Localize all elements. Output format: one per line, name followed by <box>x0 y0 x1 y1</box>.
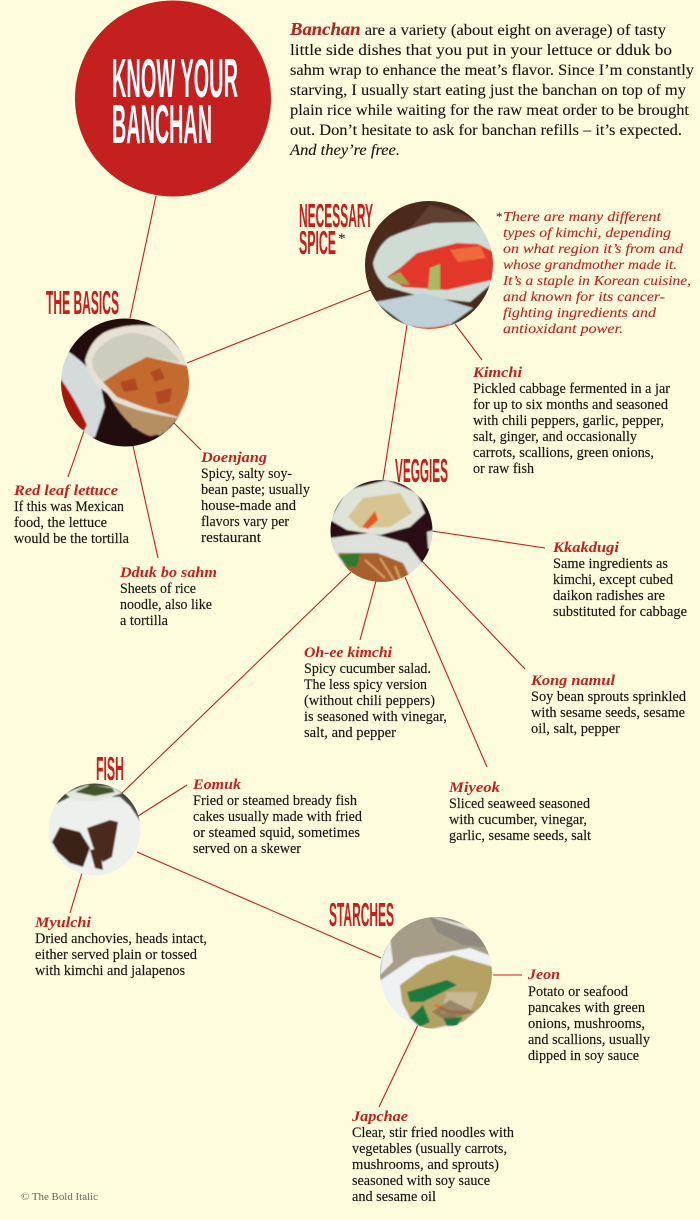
item: kimchi: Kimchi <box>472 365 523 381</box>
item: doenjang: Doenjang <box>200 450 268 466</box>
note: kimchi footnote: antioxidant power. <box>503 322 623 337</box>
note: kimchi footnote: on what region it’s from and <box>503 242 684 257</box>
credit: © The Bold Italic <box>21 1192 99 1203</box>
heading: necessary spice <box>299 197 373 261</box>
item: kimchi <box>472 365 670 477</box>
item: myulchi: with kimchi and jalapenos <box>35 963 185 979</box>
item: red leaf lettuce: food, the lettuce <box>14 515 107 531</box>
intro text <box>289 19 694 159</box>
item: kkakdugi: Kkakdugi <box>552 540 620 556</box>
item: kong namul: oil, salt, pepper <box>531 721 620 737</box>
item: japchae: Japchae <box>351 1109 408 1125</box>
item: kimchi: carrots, scallions, green onions, <box>473 445 654 461</box>
photo: myulchi <box>48 784 140 876</box>
item: jeon: Potato or seafood <box>528 984 629 1000</box>
photo: kimchi <box>365 201 493 329</box>
item: kimchi: salt, ginger, and occasionally <box>473 429 638 445</box>
item: dduk bo sahm <box>119 565 217 629</box>
intro text: out. Don’t hesitate to ask for banchan refills – it’s expected. <box>290 122 682 139</box>
item: kkakdugi: daikon radishes are <box>553 588 665 604</box>
item: red leaf lettuce: Red leaf lettuce <box>13 483 118 499</box>
photo: veggies <box>330 480 432 582</box>
item: myulchi: either served plain or tossed <box>35 947 198 963</box>
title badge: BANCHAN <box>112 93 212 155</box>
note: kimchi footnote: * <box>496 209 502 224</box>
item: jeon: onions, mushrooms, <box>528 1016 645 1032</box>
title badge <box>75 0 271 196</box>
text: FISH <box>96 750 124 787</box>
note: kimchi footnote: and known for its cancer- <box>503 290 665 305</box>
item: oh-ee kimchi: is seasoned with vinegar, <box>304 709 447 725</box>
item: japchae: vegetables (usually carrots, <box>352 1141 507 1157</box>
item: jeon: dipped in soy sauce <box>528 1048 639 1064</box>
photo: doenjang <box>61 318 189 446</box>
item: eomuk: or steamed squid, sometimes <box>193 825 360 841</box>
item: myulchi: Myulchi <box>34 915 92 931</box>
item: red leaf lettuce <box>13 483 130 547</box>
text: KNOW YOUR <box>112 47 238 109</box>
item: miyeok <box>448 780 591 844</box>
item: myulchi: Dried anchovies, heads intact, <box>35 931 207 947</box>
item: red leaf lettuce: would be the tortilla <box>14 531 130 547</box>
item: doenjang: flavors vary per <box>201 514 289 530</box>
item: oh-ee kimchi <box>304 645 447 741</box>
text: THE BASICS <box>46 284 119 321</box>
item: doenjang: restaurant <box>201 530 261 546</box>
item: myulchi <box>34 915 207 979</box>
note: kimchi footnote: It’s a staple in Korean cuisine, <box>502 274 691 289</box>
text: VEGGIES <box>395 452 448 489</box>
item: dduk bo sahm: Sheets of rice <box>120 581 196 597</box>
item: japchae: seasoned with soy sauce <box>352 1173 490 1189</box>
item: kong namul: Soy bean sprouts sprinkled <box>531 689 687 705</box>
item: japchae: mushrooms, and sprouts) <box>352 1157 499 1173</box>
note: kimchi footnote: fighting ingredients and <box>503 306 657 321</box>
item: jeon: Jeon <box>527 967 560 983</box>
item: eomuk: Fried or steamed bready fish <box>193 793 358 809</box>
note: kimchi footnote: types of kimchi, depending <box>503 226 671 241</box>
item: kkakdugi <box>552 540 687 620</box>
intro text: sahm wrap to enhance the meat’s flavor. Since I’m constantly <box>290 62 694 79</box>
item: oh-ee kimchi: The less spicy version <box>304 677 428 693</box>
item: kimchi: for up to six months and seasoned <box>473 397 669 413</box>
item: kimchi: or raw fish <box>473 461 535 477</box>
item: kong namul: Kong namul <box>530 673 616 689</box>
photo: japchae <box>380 917 492 1029</box>
item: kkakdugi: Same ingredients as <box>553 556 668 572</box>
connector lines <box>68 196 545 1107</box>
item: oh-ee kimchi: (without chili peppers) <box>304 693 435 709</box>
item: miyeok: with cucumber, vinegar, <box>449 812 587 828</box>
item: doenjang <box>200 450 311 546</box>
item: jeon: and scallions, usually <box>528 1032 651 1048</box>
item: kong namul <box>530 673 687 737</box>
intro text: starving, I usually start eating just the banchan on top of my <box>290 82 686 99</box>
item: eomuk: served on a skewer <box>193 841 301 857</box>
item: eomuk: cakes usually made with fried <box>193 809 363 825</box>
item: oh-ee kimchi: Oh-ee kimchi <box>304 645 393 661</box>
item: jeon <box>527 967 651 1064</box>
item: kkakdugi: substituted for cabbage <box>553 604 687 620</box>
item: miyeok: garlic, sesame seeds, salt <box>449 828 591 844</box>
note: kimchi footnote: There are many different <box>503 210 662 225</box>
item: kimchi: with chili peppers, garlic, pepper, <box>473 413 664 429</box>
item: japchae <box>351 1109 515 1205</box>
item: eomuk <box>192 777 363 857</box>
item: jeon: pancakes with green <box>528 1000 646 1016</box>
text: NECESSARY <box>299 197 373 234</box>
heading: necessary spice: * <box>338 231 346 247</box>
intro text: little side dishes that you put in your lettuce or dduk bo <box>290 42 672 59</box>
item: doenjang: bean paste; usually <box>201 482 311 498</box>
item: kimchi: Pickled cabbage fermented in a jar <box>473 381 670 397</box>
item: miyeok: Sliced seaweed seasoned <box>449 796 591 812</box>
item: red leaf lettuce: If this was Mexican <box>14 499 125 515</box>
item: japchae: Clear, stir fried noodles with <box>352 1125 515 1141</box>
item: eomuk: Eomuk <box>192 777 242 793</box>
item: japchae: and sesame oil <box>352 1189 436 1205</box>
text: STARCHES <box>329 896 394 933</box>
item: dduk bo sahm: a tortilla <box>120 613 169 629</box>
intro text: And they’re free. <box>289 142 400 159</box>
item: oh-ee kimchi: salt, and pepper <box>304 725 396 741</box>
item: doenjang: Spicy, salty soy- <box>201 466 292 482</box>
item: dduk bo sahm: Dduk bo sahm <box>119 565 217 581</box>
item: miyeok: Miyeok <box>448 780 501 796</box>
item: doenjang: house-made and <box>201 498 297 514</box>
item: kong namul: with sesame seeds, sesame <box>531 705 685 721</box>
item: oh-ee kimchi: Spicy cucumber salad. <box>304 661 431 677</box>
heading: necessary spice: SPICE <box>299 224 336 261</box>
item: kkakdugi: kimchi, except cubed <box>553 572 674 588</box>
intro text: Banchan are a variety (about eight on average) of tasty <box>289 19 666 39</box>
intro text: plain rice while waiting for the raw meat order to be brought <box>290 102 690 119</box>
item: dduk bo sahm: noodle, also like <box>120 597 212 613</box>
note: kimchi footnote <box>496 209 691 337</box>
note: kimchi footnote: whose grandmother made it. <box>503 258 677 273</box>
